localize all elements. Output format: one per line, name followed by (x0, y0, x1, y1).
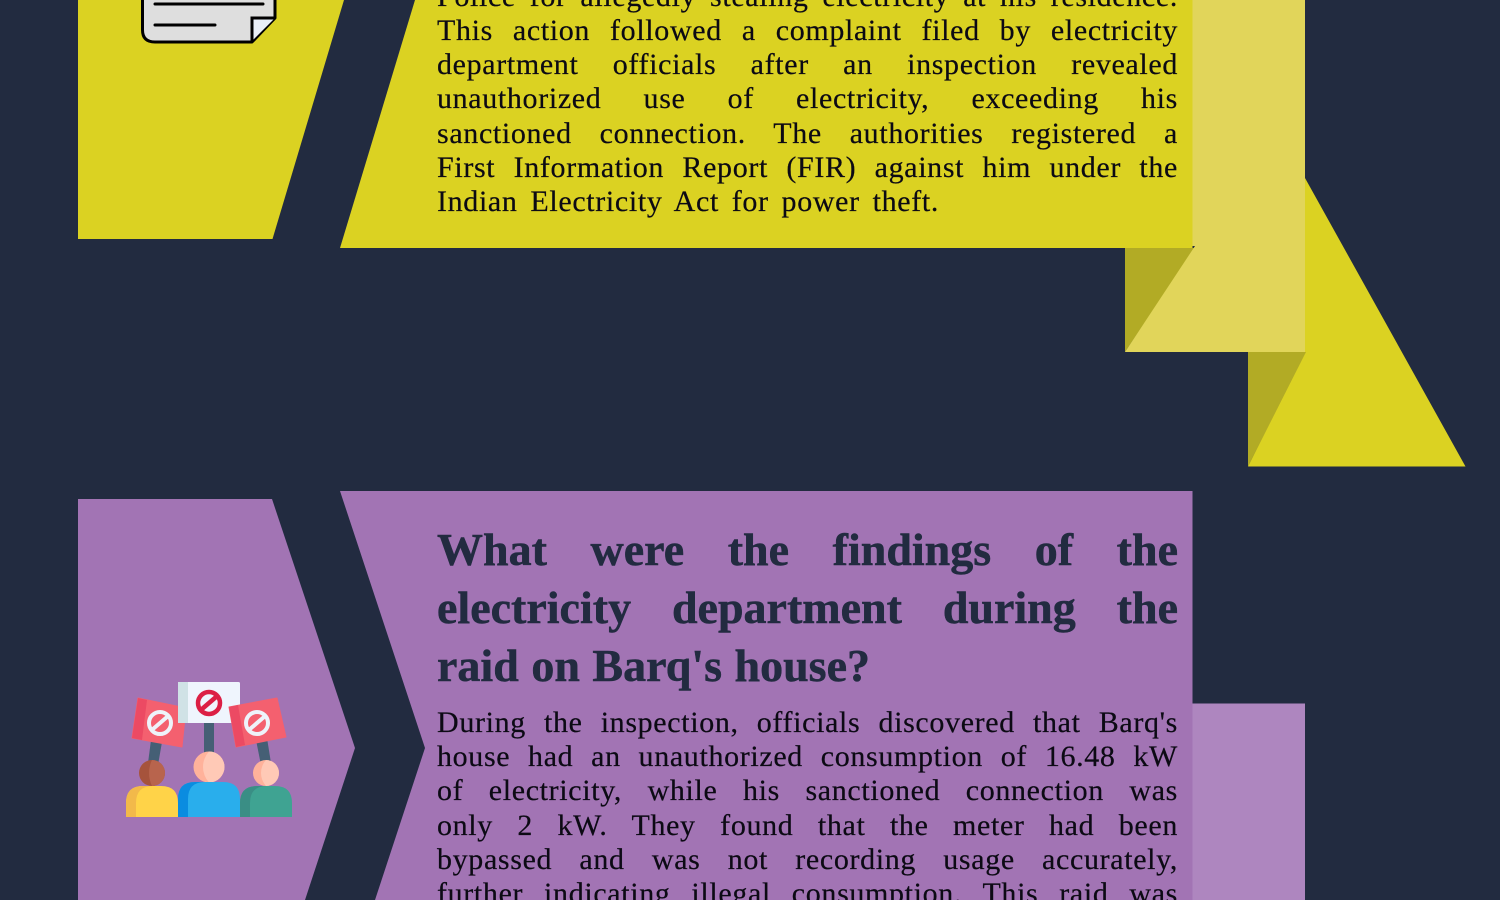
text block: yellow panel answer (437, 0, 1178, 218)
center person (178, 752, 240, 817)
ribbon: light purple band (1192, 704, 1305, 900)
text block: yellow panel answer: unauthorized use of electricity, exceeding his (437, 82, 1178, 115)
sign poles (148, 722, 271, 765)
ribbon: yellow back triangle (1248, 178, 1466, 466)
panel: yellow text panel (340, 0, 1192, 248)
ribbon: upper fold shadow (1125, 248, 1195, 352)
heading: findings of the raid: raid on Barq's house? (437, 640, 870, 691)
text block: purple panel answer: house had an unauthorized consumption of 16.48 kW (437, 740, 1178, 773)
heading: findings of the raid: What were the findings of the (437, 524, 1178, 575)
left sign (132, 698, 186, 747)
text block: yellow panel answer: This action followed a complaint filed by electricity (437, 14, 1178, 47)
text block: purple panel answer: only 2 kW. They found that the meter had been (437, 809, 1178, 842)
text block: yellow panel answer: department officials after an inspection revealed (437, 48, 1178, 81)
left person (126, 760, 178, 817)
text block: yellow panel answer: sanctioned connection. The authorities registered a (437, 117, 1178, 150)
panel: yellow icon panel (78, 0, 344, 239)
text block: purple panel answer: bypassed and was not recording usage accurately, (437, 843, 1178, 876)
right sign (229, 698, 286, 747)
heading: findings of the raid (437, 524, 1178, 691)
text block: purple panel answer: of electricity, while his sanctioned connection was (437, 774, 1178, 807)
ribbon: light yellow band (1125, 0, 1305, 352)
heading: findings of the raid: electricity department during the (437, 582, 1178, 633)
text block: purple panel answer (436, 706, 1178, 900)
text block: yellow panel answer: Indian Electricity Act for power theft. (437, 185, 939, 218)
center sign (178, 682, 240, 723)
panel: purple icon panel (78, 499, 355, 900)
icon: document (142, 0, 275, 42)
ribbon: yellow fold shadow (1248, 352, 1306, 466)
text block: yellow panel answer: First Information Report (FIR) against him under the (437, 151, 1178, 184)
text block: purple panel answer: During the inspection, officials discovered that Barq's (437, 706, 1178, 739)
icon: protesters with signs (126, 682, 292, 817)
right person (240, 760, 292, 817)
panel: purple text panel (340, 491, 1192, 900)
